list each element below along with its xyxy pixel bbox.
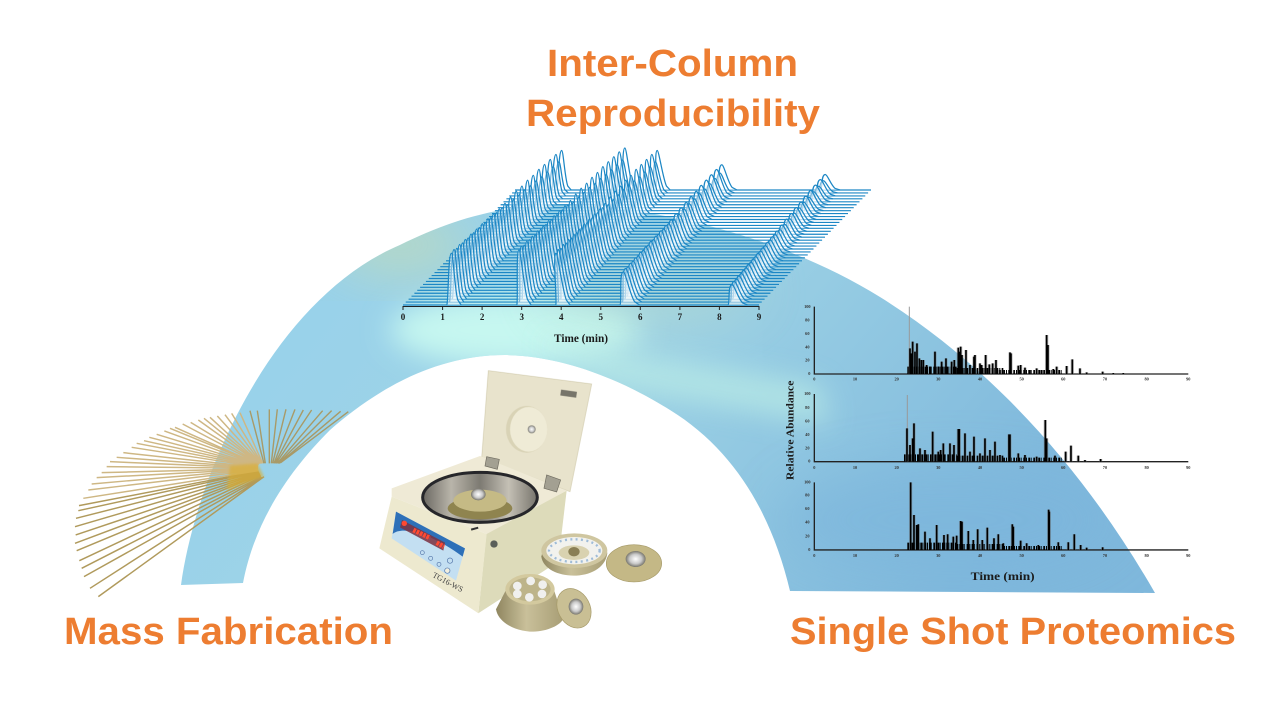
spectrum 1 bbox=[804, 304, 1190, 382]
waterfall time axis: 4 bbox=[559, 312, 564, 322]
flat rotor lid bbox=[606, 545, 662, 582]
spectrum 2: 80 bbox=[1144, 465, 1149, 470]
label: single shot proteomics: Single Shot Proteomics bbox=[790, 611, 1236, 653]
spectrum 2: 50 bbox=[1019, 465, 1024, 470]
needles, lower group bbox=[75, 471, 264, 597]
waterfall time axis: 9 bbox=[757, 312, 762, 322]
spectrum 3: 80 bbox=[1144, 553, 1149, 558]
waterfall time axis: 1 bbox=[440, 312, 445, 322]
spectrum 3: 0 bbox=[813, 553, 815, 558]
spectrum 3: 20 bbox=[805, 533, 809, 538]
label: mass fabrication: Mass Fabrication bbox=[64, 611, 393, 653]
spectrum 1: 60 bbox=[1061, 377, 1065, 382]
waterfall baselines bbox=[403, 190, 871, 305]
spectrum 2 bbox=[804, 391, 1190, 470]
spectrum 3: 90 bbox=[1186, 553, 1190, 558]
spectrum 3: 100 bbox=[804, 479, 811, 484]
spectrum 2: 70 bbox=[1103, 465, 1107, 470]
waterfall time axis: 3 bbox=[519, 312, 524, 322]
waterfall time axis: 8 bbox=[717, 312, 722, 322]
spectrum 1: 40 bbox=[805, 344, 809, 349]
spectrum 3 bbox=[804, 479, 1190, 558]
spectrum 3: 60 bbox=[1061, 553, 1065, 558]
spectrum 1: 30 bbox=[936, 377, 940, 382]
spectrum 1: 60 bbox=[805, 331, 809, 336]
waterfall time axis: 6 bbox=[638, 312, 643, 322]
waterfall chromatogram bbox=[403, 148, 871, 305]
title: inter-column reproducibility: Reproducibility bbox=[526, 93, 820, 135]
spectrum 1: 20 bbox=[894, 377, 899, 382]
spectrum 3: 0 bbox=[808, 547, 810, 552]
spectrum 3: 10 bbox=[853, 553, 857, 558]
spectrum 2: 40 bbox=[805, 432, 809, 437]
centrifuge body bbox=[379, 456, 567, 613]
spectrum 1: 40 bbox=[978, 377, 982, 382]
spectrum 2: 0 bbox=[813, 465, 815, 470]
gold highlight at needle tips bbox=[227, 463, 264, 491]
spectrum 3: 50 bbox=[1019, 553, 1024, 558]
rotor chamber bbox=[423, 472, 537, 522]
waterfall time axis: Time (min) bbox=[554, 333, 608, 345]
title: inter-column reproducibility: Inter-Column bbox=[547, 43, 798, 85]
proteomics spectra bbox=[785, 304, 1190, 583]
control panel bbox=[392, 512, 465, 581]
waterfall time axis: 2 bbox=[480, 312, 485, 322]
centrifuge lid bbox=[482, 371, 592, 492]
waterfall time axis: 7 bbox=[678, 312, 683, 322]
blue gradient arch bbox=[170, 195, 1170, 605]
needle fan: mass fabricated columns bbox=[75, 409, 348, 597]
hinges bbox=[485, 457, 561, 492]
spectrum 2: 60 bbox=[1061, 465, 1065, 470]
spectrum 1: 20 bbox=[805, 358, 809, 363]
title: inter-column reproducibility bbox=[526, 43, 820, 135]
spectrum 1: 0 bbox=[808, 371, 810, 376]
spectrum 2: 30 bbox=[936, 465, 940, 470]
angle rotor lid bbox=[550, 583, 598, 634]
spectrum 1: 0 bbox=[813, 377, 815, 382]
spectrum 1: 70 bbox=[1103, 377, 1107, 382]
model label: TG16-WS bbox=[431, 570, 465, 594]
infographic canvas bbox=[66, 48, 1234, 652]
spectrum 2: 20 bbox=[894, 465, 899, 470]
spectrum 2: 0 bbox=[808, 459, 810, 464]
x axis label: Time (min) bbox=[971, 569, 1035, 583]
spectrum 2: 20 bbox=[805, 446, 809, 451]
spectrum 3: 20 bbox=[894, 553, 899, 558]
waterfall time axis: 5 bbox=[599, 312, 604, 322]
spectrum 3: 40 bbox=[978, 553, 982, 558]
centrifuge and rotors bbox=[379, 371, 662, 634]
spectrum 1: 80 bbox=[1144, 377, 1149, 382]
spectrum 2: 100 bbox=[804, 391, 811, 396]
spectrum 1: 80 bbox=[805, 317, 809, 322]
angle rotor bbox=[496, 574, 563, 632]
spectrum 1: 100 bbox=[804, 304, 811, 309]
spectrum 3: 60 bbox=[805, 506, 809, 511]
waterfall time axis bbox=[401, 306, 762, 345]
peak bands bbox=[444, 148, 860, 305]
spectrum 3: 70 bbox=[1103, 553, 1107, 558]
waterfall time axis: 0 bbox=[401, 312, 406, 322]
spectrum 3: 80 bbox=[805, 493, 809, 498]
spectrum 2: 10 bbox=[853, 465, 857, 470]
needles, middle group bbox=[83, 413, 263, 498]
spectrum 1: 10 bbox=[853, 377, 857, 382]
spectrum 1: 50 bbox=[1019, 377, 1024, 382]
spectrum 2: 80 bbox=[805, 405, 809, 410]
spectrum 1: 90 bbox=[1186, 377, 1190, 382]
spectrum 2: 60 bbox=[805, 419, 809, 424]
needles, upper group bbox=[250, 409, 348, 463]
flat rotor bbox=[541, 533, 607, 576]
y axis label: Relative Abundance bbox=[785, 380, 796, 480]
spectrum 2: 90 bbox=[1186, 465, 1190, 470]
spectrum 2: 40 bbox=[978, 465, 982, 470]
spectrum 3: 30 bbox=[936, 553, 940, 558]
spectrum 3: 40 bbox=[805, 520, 809, 525]
